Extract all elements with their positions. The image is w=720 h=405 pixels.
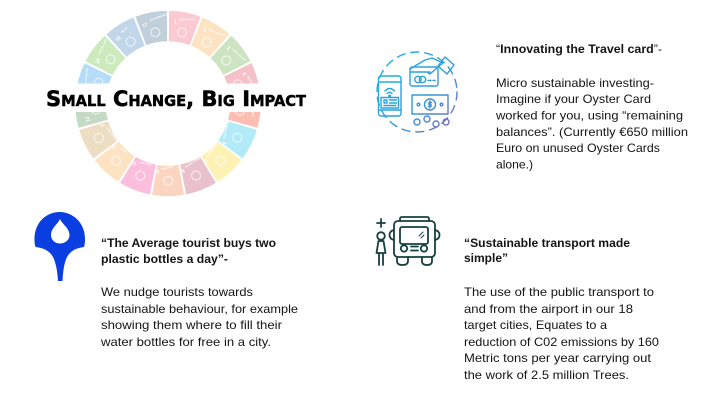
- text: plastic bottles: showing them where to fill their: [101, 318, 282, 332]
- text: plastic bottles: We nudge tourists towards: [101, 285, 253, 299]
- goal tile 16: 16: [114, 35, 123, 43]
- goal tile 17: [135, 5, 178, 49]
- goal tile 2: 2: [202, 27, 207, 34]
- goal tile 1: [168, 10, 201, 46]
- text: sustainable transport: reduction of C02 emissions by 160: [464, 335, 659, 349]
- text: innovating the travel card: “Innovating the Travel card ”-: [496, 42, 662, 56]
- text: sustainable transport: “Sustainable transport made: [464, 236, 630, 250]
- goal tile 8: DECENT WORK: [184, 157, 202, 169]
- goal tile 12: 12: [97, 121, 106, 129]
- text: innovating the travel card: Micro sustainable investing-: [496, 76, 654, 90]
- goal tile 16: [106, 13, 153, 60]
- goal tile 2: [189, 17, 232, 61]
- goal tile 3: [207, 35, 255, 83]
- text: innovating the travel card: Imagine if your Oyster Card: [496, 92, 651, 106]
- goal tile 11: 11: [110, 143, 117, 151]
- goal tile 11: [91, 136, 137, 182]
- text: sustainable transport: target cities, Equates to a: [464, 318, 607, 332]
- text: sustainable transport: the work of 2.5 million Trees.: [464, 368, 629, 382]
- goal tile 17: PARTNERSHIPS: [149, 13, 168, 22]
- text: sustainable transport: [464, 236, 659, 382]
- goal tile 9: 9: [156, 169, 160, 176]
- goal tile 15: LIFE ON LAND: [98, 39, 108, 55]
- goal tile 3: GOOD HEALTH: [231, 48, 247, 62]
- goal tile 15: [85, 33, 131, 77]
- goal tile 9: INDUSTRY: [161, 166, 174, 171]
- text: innovating the travel card: alone.): [496, 158, 533, 172]
- goal tile 5: GENDER: [251, 107, 255, 117]
- title: Small Change, Big Impact: [46, 87, 307, 112]
- text: plastic bottles: plastic bottles a day”-: [101, 252, 228, 266]
- text: plastic bottles: water bottles for free in a city.: [100, 335, 271, 349]
- goal tile 14: 14: [85, 86, 91, 92]
- goal tile 8: 8: [181, 168, 186, 175]
- goal tile 14: [75, 62, 113, 98]
- goal tile 13: 13: [85, 115, 92, 123]
- goal tile 6: 6: [222, 141, 229, 145]
- icon: bus and passenger: [376, 217, 440, 265]
- goal tile 17: 17: [141, 22, 149, 29]
- text: sustainable transport: The use of the public transport to: [464, 285, 654, 299]
- goal tile 9: [146, 161, 185, 201]
- goal tile 7: 7: [204, 158, 210, 164]
- goal tile 12: RESPONSIBLE: [106, 127, 119, 143]
- text: innovating the travel card: worked for you, using “remaining: [495, 108, 683, 122]
- goal tile 2: ZERO HUNGER: [208, 28, 226, 37]
- icon: payment methods: [377, 52, 457, 132]
- goal tile 15: 15: [95, 57, 103, 65]
- goal tile 12: [74, 112, 122, 160]
- goal tile 1: 1: [174, 20, 177, 26]
- goal tile 10: REDUCED: [139, 161, 152, 166]
- goal tile 10: 10: [130, 161, 137, 168]
- text: plastic bottles: sustainable behaviour, for example: [101, 302, 298, 316]
- goal tile 6: CLEAN WATER: [222, 122, 230, 140]
- goal tile 4: QUALITY: [246, 75, 254, 87]
- goal tile 4: [220, 62, 266, 107]
- goal tile 7: [195, 138, 242, 186]
- goal tile 4: 4: [240, 71, 247, 77]
- SDG goals ring: [70, 5, 266, 201]
- text: innovating the travel card: Euro on unused Oyster Cards: [496, 141, 660, 155]
- white band behind title: [40, 84, 312, 112]
- goal tile 16: PEACE: [120, 26, 129, 34]
- text: plastic bottles: [100, 236, 298, 349]
- text: innovating the travel card: balances”. (Currently €650 million: [496, 125, 688, 139]
- text: sustainable transport: and from the airport in our 18: [464, 302, 633, 316]
- icon: water drop pin: [34, 212, 85, 281]
- goal tile 14: LIFE BELOW: [85, 67, 89, 83]
- goal tile 3: 3: [225, 45, 231, 52]
- goal tile 5: 5: [246, 102, 252, 105]
- goal tile 1: NO POVERTY: [179, 18, 195, 22]
- text: sustainable transport: simple”: [464, 251, 508, 265]
- text: innovating the travel card: [495, 42, 688, 172]
- goal tile 13: [70, 88, 112, 128]
- goal tile 10: [119, 154, 157, 195]
- goal tile 7: CLEAN ENERGY: [206, 141, 220, 158]
- goal tile 5: [226, 95, 264, 131]
- text: sustainable transport: Metric tons per year carrying out: [464, 351, 652, 365]
- text: plastic bottles: “The Average tourist buys two: [101, 236, 276, 250]
- goal tile 6: [215, 120, 257, 160]
- goal tile 11: CITIES: [119, 147, 128, 154]
- goal tile 8: [171, 153, 217, 200]
